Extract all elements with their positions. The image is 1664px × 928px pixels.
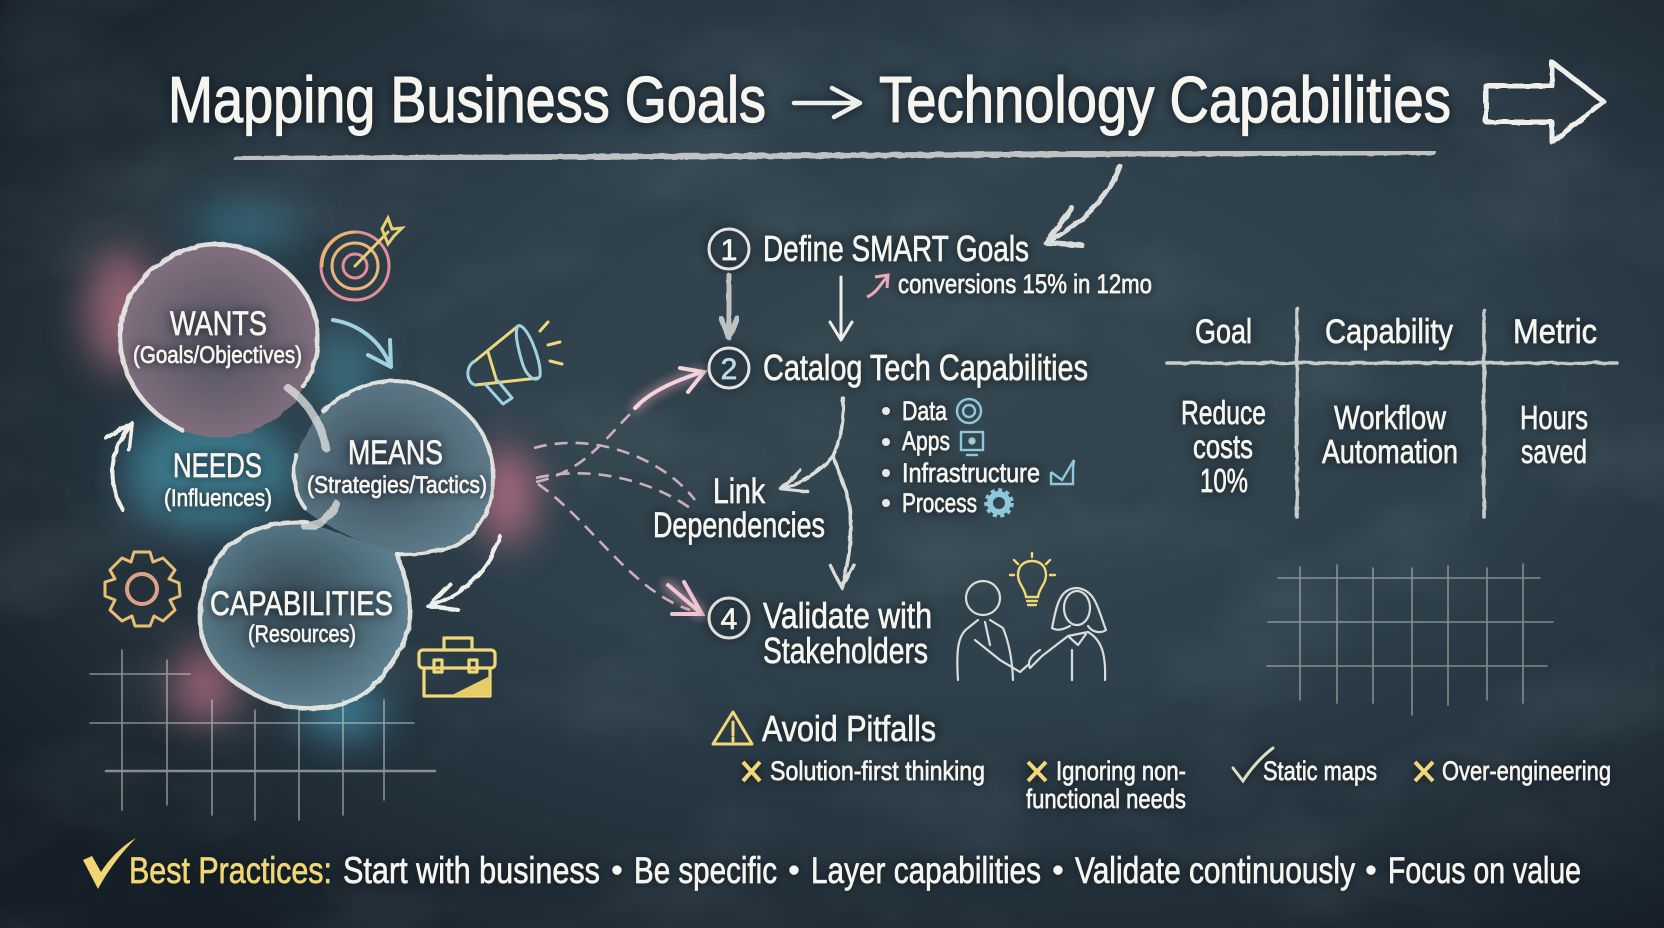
icon: light bulb [1010, 553, 1055, 605]
text: CAPABILITIES: (Resources) [248, 621, 356, 648]
step 1: 1 [721, 234, 737, 267]
table row [1181, 394, 1588, 499]
table header: Capability [1325, 313, 1453, 351]
table row: Workflow [1334, 399, 1446, 436]
step 1: Define SMART Goals [763, 228, 1029, 269]
text: link dependencies: Dependencies [653, 506, 825, 545]
decorative grid: left [90, 650, 435, 820]
text: best practices: • [1052, 852, 1064, 888]
title [168, 63, 1451, 136]
arrow: means to capabilities [428, 536, 500, 610]
text: NEEDS: (Influences) [164, 485, 272, 512]
icon: data [957, 399, 981, 423]
icon: target [321, 218, 402, 300]
pitfall: over engineering: Over-engineering [1442, 756, 1611, 786]
list: capability types: Infrastructure [902, 458, 1040, 488]
table row: 10% [1200, 462, 1248, 499]
icon: apps [961, 432, 983, 455]
pitfall: non-functional: functional needs [1026, 784, 1186, 814]
table row: Reduce [1181, 394, 1266, 431]
arrow: pink to step two [635, 368, 704, 408]
icon: pink up arrow [867, 275, 888, 297]
title underline [236, 152, 1433, 159]
text: WANTS: WANTS [170, 305, 267, 343]
text: WANTS: (Goals/Objectives) [133, 342, 302, 369]
panel: four steps [653, 228, 1152, 680]
arrow: wants to means [333, 320, 391, 367]
text: best practices: • [611, 852, 623, 888]
text: NEEDS [164, 447, 272, 512]
text: MEANS: (Strategies/Tactics) [307, 472, 487, 499]
arrow: title connector [794, 88, 860, 117]
text: best practices: Best Practices: [129, 850, 332, 891]
text: best practices: Focus on value [1388, 850, 1581, 891]
pitfall: static maps [1233, 748, 1377, 786]
icon: briefcase [419, 638, 495, 696]
panel: WANTS NEEDS MEANS CAPABILITIES diagram [86, 206, 562, 740]
step 1 [709, 228, 1029, 269]
list: capability types: Data [902, 396, 948, 426]
chalk bridge between bubbles [288, 388, 336, 526]
text: link dependencies: Link [713, 472, 765, 511]
icon: check mark [83, 838, 136, 889]
step 2: 2 [721, 353, 737, 386]
pitfall: static maps: Static maps [1263, 756, 1377, 786]
icon: gear [105, 552, 180, 626]
table header [1195, 313, 1597, 351]
panel: avoid pitfalls [713, 708, 1611, 814]
step 4: Stakeholders [763, 630, 928, 671]
colored chalk smudges [86, 206, 535, 740]
pitfall: solution first: Solution-first thinking [770, 756, 985, 786]
panel: best practices [83, 838, 1581, 891]
text: MEANS: MEANS [348, 434, 443, 472]
bubble: MEANS [291, 381, 493, 554]
step 4: 4 [721, 603, 737, 636]
text: NEEDS: NEEDS [173, 447, 262, 485]
table row: saved [1521, 433, 1587, 470]
arrow: title to step one [1046, 166, 1120, 245]
icon: process gear [986, 490, 1012, 516]
text: best practices: Start with business [343, 850, 600, 891]
pitfall: non-functional [1026, 756, 1186, 814]
text: CAPABILITIES: CAPABILITIES [210, 585, 393, 623]
text: best practices [129, 850, 1581, 891]
table header: Metric [1513, 313, 1597, 351]
arrow: needs to wants [106, 423, 132, 510]
table row: costs [1193, 428, 1253, 465]
arrow: branch to link dependencies and step 4 [781, 398, 854, 588]
text: best practices: Validate continuously [1075, 850, 1355, 891]
arrow: pink to step four [668, 582, 702, 614]
dashed connector lines [534, 405, 695, 610]
text: best practices: • [788, 852, 800, 888]
arrow: step 1 to step 2 [721, 275, 737, 338]
icon: infrastructure [1051, 460, 1074, 484]
text: link dependencies [653, 472, 825, 545]
decorative grid: right [1267, 564, 1553, 715]
text: best practices: • [1365, 852, 1377, 888]
icon: large outlined arrow [1486, 62, 1604, 142]
title: Mapping Business Goals [168, 63, 766, 136]
icon: warning triangle [713, 712, 752, 744]
text: CAPABILITIES [210, 585, 393, 648]
arrow: goals down [830, 277, 852, 340]
heading: Avoid Pitfalls [762, 708, 936, 749]
text: best practices: Be specific [634, 850, 777, 891]
text: conversions: conversions 15% in 12mo [898, 269, 1152, 299]
title: Technology Capabilities [879, 63, 1451, 136]
text: MEANS [307, 434, 487, 499]
table row: Hours [1520, 399, 1588, 436]
pitfall: non-functional: Ignoring non- [1056, 756, 1186, 786]
text: WANTS [133, 305, 302, 369]
bubble: WANTS [120, 244, 318, 437]
panel: goal capability metric table [1167, 308, 1617, 517]
icon: handshake people [957, 581, 1106, 680]
icon: megaphone [468, 322, 562, 404]
step 2: Catalog Tech Capabilities [763, 347, 1088, 388]
table header: Goal [1195, 313, 1252, 351]
text: best practices: Layer capabilities [811, 850, 1041, 891]
list: capability types: Apps [902, 426, 950, 456]
step 4: Validate with [763, 595, 932, 636]
list: capability types [882, 396, 1040, 518]
step 4 [709, 595, 932, 671]
table row: Automation [1322, 433, 1458, 470]
bubble: CAPABILITIES [200, 522, 410, 708]
table rules [1167, 308, 1617, 517]
list: capability types: Process [902, 488, 977, 518]
